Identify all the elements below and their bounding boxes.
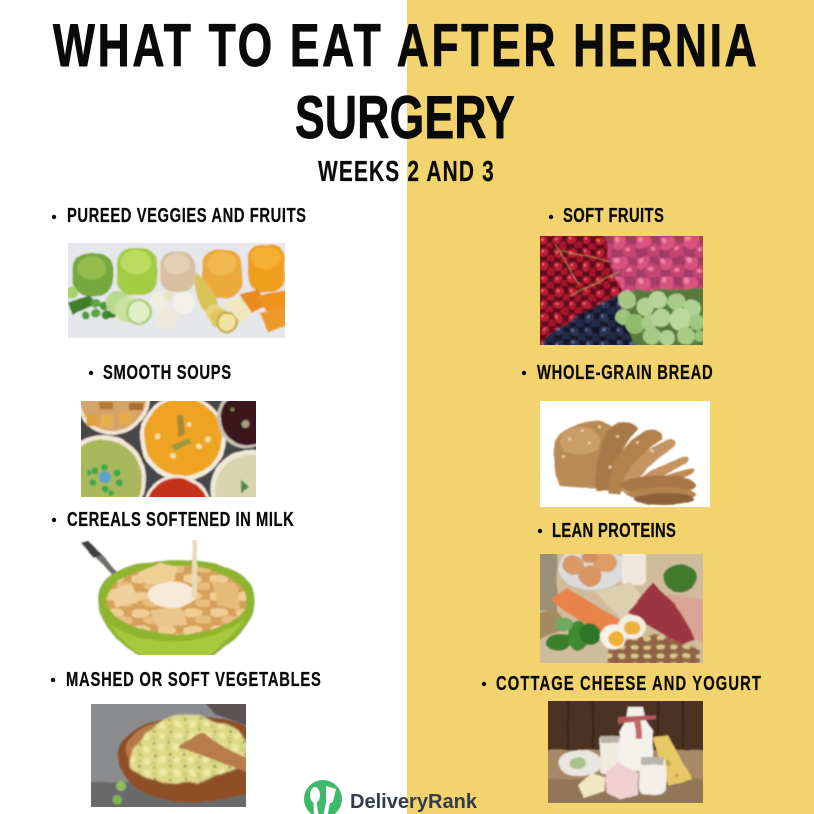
label: MASHED OR SOFT VEGETABLES (66, 668, 321, 691)
label: CEREALS SOFTENED IN MILK (67, 508, 294, 531)
title: SURGERY (295, 85, 515, 152)
subtitle: WEEKS 2 AND 3 (318, 156, 494, 188)
label: SMOOTH SOUPS (103, 361, 231, 384)
item: pureed veggies and fruits (52, 204, 306, 348)
item: mashed or soft vegetables (51, 668, 321, 814)
image: bowls of soup (81, 401, 256, 497)
logo text: DeliveryRank (350, 790, 478, 813)
label: COTTAGE CHEESE AND YOGURT (496, 672, 761, 695)
title: WHAT TO EAT AFTER HERNIA (53, 13, 757, 80)
item: whole-grain bread (522, 361, 713, 507)
image: bowl of mashed vegetables (91, 704, 246, 807)
label: SOFT FRUITS (563, 204, 664, 227)
item: soft fruits (528, 204, 715, 357)
yellow background panel (407, 0, 814, 814)
item: smooth soups (60, 361, 288, 543)
item: cereals softened in milk (52, 508, 294, 665)
label: PUREED VEGGIES AND FRUITS (67, 204, 306, 227)
logo icon: fork and spoon (304, 780, 342, 814)
image: sliced loaf of bread (540, 401, 710, 507)
image: assorted berries (540, 236, 703, 345)
label: WHOLE-GRAIN BREAD (537, 361, 713, 384)
item: lean proteins (530, 519, 713, 673)
image: eggs, salmon, meat and nuts (540, 554, 703, 663)
logo: DeliveryRank (304, 780, 478, 814)
label: LEAN PROTEINS (552, 519, 676, 542)
title (53, 13, 757, 152)
item: cottage cheese and yogurt (482, 672, 761, 813)
image: jars of puree with vegetables (68, 243, 285, 338)
image: dairy products on table (548, 701, 703, 803)
image: bowl of cereal with milk (80, 540, 255, 655)
